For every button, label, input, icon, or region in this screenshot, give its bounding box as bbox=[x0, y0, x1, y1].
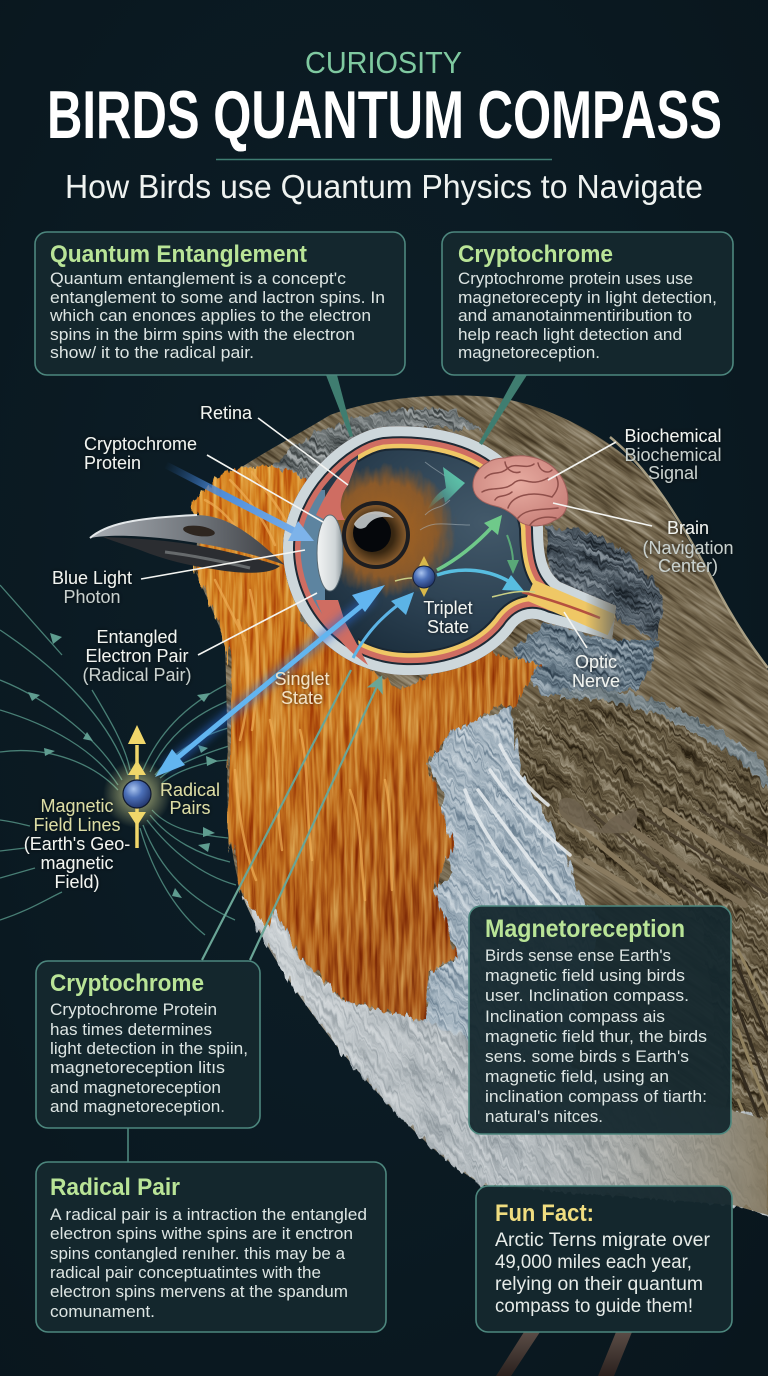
crown grey feathers bbox=[270, 408, 480, 510]
panel: fun fact: Arctic Terns migrate over bbox=[495, 1230, 711, 1251]
subtitle: How Birds use Quantum Physics to Navigate bbox=[65, 168, 703, 205]
bird body and head bbox=[195, 395, 768, 1215]
small green arrow bbox=[507, 535, 513, 562]
panel: magnetoreception: magnetic field using birds bbox=[485, 966, 685, 985]
panel: quantum entanglement: Quantum Entanglement bbox=[50, 241, 307, 268]
label entangled electron pair: Entangled bbox=[96, 627, 178, 647]
beak lower mandible bbox=[103, 537, 280, 573]
panel: radical pair: A radical pair is a intraction the entangled bbox=[50, 1205, 367, 1224]
label radical pairs: Pairs bbox=[169, 798, 211, 818]
panel: radical pair: electron spins mervens at the spandum bbox=[50, 1282, 348, 1301]
nerve fade bbox=[587, 595, 616, 640]
signal arrows in eye bbox=[395, 467, 535, 597]
label radical pairs bbox=[160, 780, 220, 818]
lens bbox=[317, 515, 343, 591]
panel: quantum entanglement: spins in the birm spins with the electron bbox=[50, 325, 355, 344]
panel: fun fact: 49,000 miles each year, bbox=[495, 1252, 692, 1273]
panel: cryptochrome top bbox=[442, 232, 733, 375]
label retina: Retina bbox=[200, 403, 253, 423]
orange breast bbox=[190, 466, 540, 1020]
wing bbox=[515, 698, 768, 1150]
label magnetic field lines: Magnetic bbox=[40, 796, 114, 816]
pointer lines bbox=[141, 418, 652, 655]
beak highlight bbox=[90, 515, 197, 538]
panel: cryptochrome top: magnetoreception. bbox=[458, 343, 600, 362]
panel: cryptochrome bottom: and magnetoreception. bbox=[50, 1097, 225, 1116]
panel: magnetoreception: magnetic field, using an bbox=[485, 1067, 669, 1086]
panel: cryptochrome bottom: magnetoreception litıs bbox=[50, 1058, 225, 1077]
label entangled electron pair bbox=[82, 627, 192, 685]
label triplet state: State bbox=[427, 617, 469, 637]
label blue light: Photon bbox=[63, 587, 121, 607]
orange highlight feathers bbox=[205, 472, 392, 900]
label cryptochrome protein: Cryptochrome bbox=[84, 434, 197, 454]
label magnetic field lines: magnetic bbox=[40, 853, 114, 873]
label cryptochrome protein: Protein bbox=[84, 453, 141, 473]
belly colour tint bbox=[243, 897, 768, 1215]
blue atom bbox=[413, 566, 435, 588]
primary feathers bbox=[560, 810, 768, 1170]
panel: magnetoreception bbox=[469, 906, 731, 1134]
label blue light bbox=[52, 568, 132, 607]
panel: quantum entanglement bbox=[35, 232, 405, 375]
label brain bbox=[642, 518, 734, 576]
bird illustration bbox=[90, 395, 768, 1376]
rounded wing coverts bbox=[559, 798, 638, 833]
label magnetic field lines: Field) bbox=[54, 872, 100, 892]
grey flank bbox=[423, 707, 600, 1130]
blue light ray bbox=[166, 465, 314, 541]
panel: cryptochrome top: and amanotainmentiribution to bbox=[458, 306, 692, 325]
faint signal lines bbox=[395, 578, 535, 597]
eye ball bbox=[342, 501, 410, 569]
label brain: Brain bbox=[667, 518, 709, 538]
optic nerve core bbox=[530, 590, 612, 625]
panel: cryptochrome bottom: Cryptochrome bbox=[50, 970, 204, 997]
label biochemical signal bbox=[624, 426, 722, 483]
label triplet state: Triplet bbox=[423, 598, 473, 618]
label blue light: Blue Light bbox=[52, 568, 132, 588]
curved blue arrow to atom bbox=[353, 592, 414, 658]
white flank feather strokes bbox=[465, 745, 570, 905]
label singlet state: Singlet bbox=[274, 669, 330, 689]
back rim highlight bbox=[610, 437, 768, 668]
double blue arrow bbox=[155, 585, 385, 777]
kicker: CURIOSITY bbox=[305, 45, 462, 80]
panel: radical pair: comunament. bbox=[50, 1302, 155, 1321]
panel: magnetoreception: Birds sense ense Earth's bbox=[485, 946, 671, 965]
panel: fun fact: relying on their quantum bbox=[495, 1274, 703, 1295]
label magnetic field lines: Field Lines bbox=[33, 815, 121, 835]
panel: magnetoreception: sens. some birds s Earth's bbox=[485, 1047, 689, 1066]
label brain: Center) bbox=[658, 556, 718, 576]
retinal layers bbox=[283, 426, 616, 675]
radical pair atom bbox=[103, 725, 171, 848]
label optic nerve: Nerve bbox=[572, 671, 620, 691]
panel: cryptochrome bottom: light detection in the spiin, bbox=[50, 1039, 248, 1058]
retina tissue near lens bbox=[316, 458, 368, 665]
panel: radical pair: electron spins withe spins are it enctron bbox=[50, 1224, 353, 1243]
small yellow arrows at atom bbox=[419, 556, 429, 597]
panel: radical pair: spins contangled renıher. this may be a bbox=[50, 1244, 346, 1263]
label optic nerve bbox=[572, 652, 620, 691]
panel: quantum entanglement: which can enonœs applies to the electron bbox=[49, 306, 371, 325]
panel: cryptochrome top: help reach light detection and bbox=[458, 325, 682, 344]
label magnetic field lines: (Earth's Geo- bbox=[24, 834, 130, 854]
label optic nerve: Optic bbox=[575, 652, 617, 672]
blue cornea bbox=[285, 490, 325, 620]
panel: cryptochrome top: magnetorecepty in light detection, bbox=[458, 288, 717, 307]
panel: fun fact: Fun Fact: bbox=[495, 1200, 594, 1227]
retinal crack lines bbox=[420, 462, 470, 530]
panel: radical pair: radical pair conceptuatintes with the bbox=[50, 1263, 321, 1282]
label singlet state: State bbox=[281, 688, 323, 708]
beak upper mandible bbox=[90, 515, 285, 565]
brain bbox=[473, 456, 568, 526]
white belly bbox=[243, 897, 768, 1215]
nape grey-blue bbox=[545, 527, 665, 640]
nerve blood vessel bbox=[522, 592, 600, 618]
magnetic field lines bbox=[0, 585, 240, 935]
panel: fun fact bbox=[476, 1186, 732, 1332]
label magnetic field lines bbox=[24, 796, 130, 892]
beak lower highlight bbox=[165, 552, 250, 568]
label biochemical signal: Biochemical bbox=[624, 445, 722, 465]
label brain: (Navigation bbox=[642, 538, 734, 558]
panel: fun fact: compass to guide them! bbox=[495, 1296, 693, 1317]
label triplet state bbox=[423, 598, 473, 637]
panel: cryptochrome top: Cryptochrome protein uses use bbox=[458, 269, 693, 288]
panel: magnetoreception: magnetic field thur, the birds bbox=[485, 1027, 707, 1046]
label biochemical signal: Signal bbox=[648, 463, 698, 483]
grey band above wing bbox=[560, 688, 768, 800]
blue curved arrow bbox=[437, 570, 510, 582]
teal arrow bbox=[427, 467, 465, 510]
teal connector lines from panels to bird bbox=[128, 375, 527, 1162]
eye interior bbox=[283, 426, 616, 676]
label entangled electron pair: (Radical Pair) bbox=[82, 665, 192, 685]
label entangled electron pair: Electron Pair bbox=[85, 646, 189, 666]
panel: cryptochrome top: Cryptochrome bbox=[458, 241, 613, 268]
panel: quantum entanglement: show/ it to the radical pair. bbox=[50, 343, 254, 362]
yellow spin arrows bbox=[135, 745, 139, 848]
panel: cryptochrome bottom: has times determines bbox=[50, 1020, 212, 1039]
panel: magnetoreception: Inclination compass ais bbox=[485, 1007, 665, 1026]
panel: cryptochrome bottom: and magnetoreception bbox=[50, 1078, 221, 1097]
legs bbox=[496, 1332, 632, 1376]
panel: magnetoreception: natural's nitces. bbox=[485, 1107, 603, 1126]
panel: quantum entanglement: entanglement to some and lactron spins. In bbox=[50, 288, 385, 307]
panel: magnetoreception: Magnetoreception bbox=[485, 915, 685, 943]
panel: magnetoreception: user. Inclination compass. bbox=[485, 986, 689, 1005]
divider bbox=[216, 158, 552, 160]
green arrow bbox=[437, 526, 493, 570]
eye surrounding feathers bbox=[313, 464, 457, 596]
panel: quantum entanglement: Quantum entanglement is a concept'c bbox=[50, 269, 347, 288]
title block bbox=[47, 45, 722, 205]
eye cross-section bbox=[283, 426, 616, 676]
panel: magnetoreception: inclination compass of tiarth: bbox=[485, 1087, 707, 1106]
lower nape grey-blue bbox=[513, 622, 660, 695]
label cryptochrome protein bbox=[84, 434, 197, 473]
panel: radical pair: Radical Pair bbox=[50, 1174, 180, 1201]
labels on eye diagram bbox=[24, 403, 734, 892]
label singlet state bbox=[274, 669, 330, 708]
label radical pairs: Radical bbox=[160, 780, 220, 800]
nostril bbox=[182, 524, 216, 538]
panel: cryptochrome bottom: Cryptochrome Protein bbox=[50, 1000, 217, 1019]
panel: radical pair bbox=[36, 1162, 386, 1332]
label biochemical signal: Biochemical bbox=[624, 426, 722, 446]
panel: cryptochrome bottom bbox=[36, 961, 260, 1128]
